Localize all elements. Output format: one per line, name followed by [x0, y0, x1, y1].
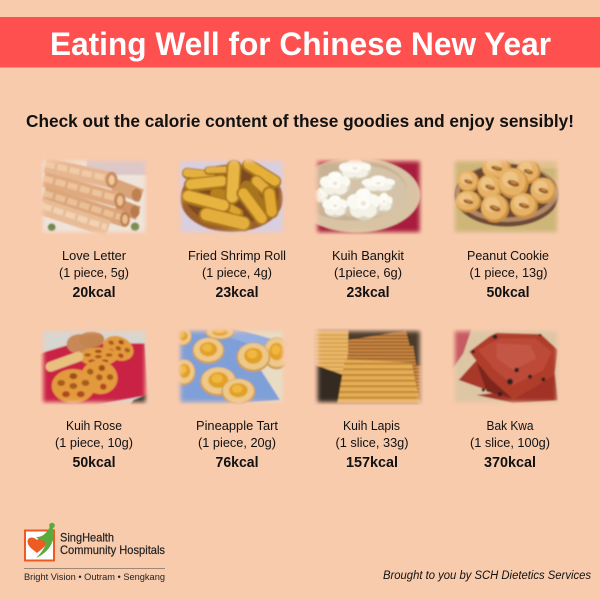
- item: Love Letter: [40, 158, 148, 301]
- icon: heart and figure: [25, 523, 55, 560]
- title: Eating Well for Chinese New Year: [50, 26, 551, 62]
- name: Pineapple Tart: [196, 419, 279, 433]
- photo: pineapple tarts: [178, 328, 286, 404]
- calories: 157kcal: [346, 455, 398, 471]
- photo: peanut cookies: [452, 157, 560, 235]
- portion: (1piece, 6g): [334, 266, 402, 280]
- item: Pineapple Tart: [178, 328, 286, 467]
- wordmark line 2: Community Hospitals: [60, 543, 165, 557]
- photo: kuih lapis: [313, 328, 423, 405]
- subtitle: Check out the calorie content of these goodies and enjoy sensibly!: [26, 111, 574, 131]
- wordmark: SingHealth: [60, 530, 114, 544]
- divider: [24, 568, 165, 569]
- name: Bak Kwa: [486, 419, 534, 433]
- item: Fried Shrimp Roll: [177, 158, 287, 301]
- name: Kuih Lapis: [343, 419, 400, 433]
- campuses: Bright Vision • Outram • Sengkang: [24, 572, 165, 583]
- calories: 23kcal: [346, 285, 390, 301]
- item: Kuih Bangkit: [314, 158, 423, 297]
- calories: 50kcal: [72, 455, 116, 471]
- item: Peanut Cookie: [452, 157, 560, 301]
- title banner: [0, 17, 600, 68]
- calories: 20kcal: [72, 285, 116, 301]
- portion: (1 slice, 100g): [470, 436, 550, 450]
- calories: 50kcal: [486, 285, 530, 301]
- photo: love letter wafers: [40, 158, 148, 235]
- name: Kuih Bangkit: [332, 249, 405, 263]
- calories: 76kcal: [216, 455, 258, 471]
- portion: (1 piece, 20g): [198, 436, 276, 450]
- logo: SingHealth Community Hospitals: [24, 523, 165, 583]
- portion: (1 slice, 33g): [336, 436, 408, 450]
- photo: kuih rose: [40, 328, 148, 405]
- name: Love Letter: [62, 249, 126, 263]
- calories: 370kcal: [484, 455, 536, 471]
- name: Kuih Rose: [66, 419, 122, 433]
- photo: fried shrimp rolls: [177, 158, 287, 235]
- calories: 23kcal: [216, 285, 258, 301]
- portion: (1 piece, 4g): [202, 266, 272, 280]
- item: Kuih Lapis: [313, 328, 423, 471]
- portion: (1 piece, 10g): [55, 436, 133, 450]
- item: Bak Kwa: [452, 328, 560, 471]
- credit: Brought to you by SCH Dietetics Services: [383, 570, 591, 582]
- photo: kuih bangkit: [314, 158, 423, 235]
- portion: (1 piece, 13g): [470, 266, 548, 280]
- portion: (1 piece, 5g): [59, 266, 129, 280]
- name: Fried Shrimp Roll: [188, 249, 286, 263]
- name: Peanut Cookie: [467, 249, 549, 263]
- item: Kuih Rose: [40, 328, 148, 471]
- photo: bak kwa: [452, 328, 560, 405]
